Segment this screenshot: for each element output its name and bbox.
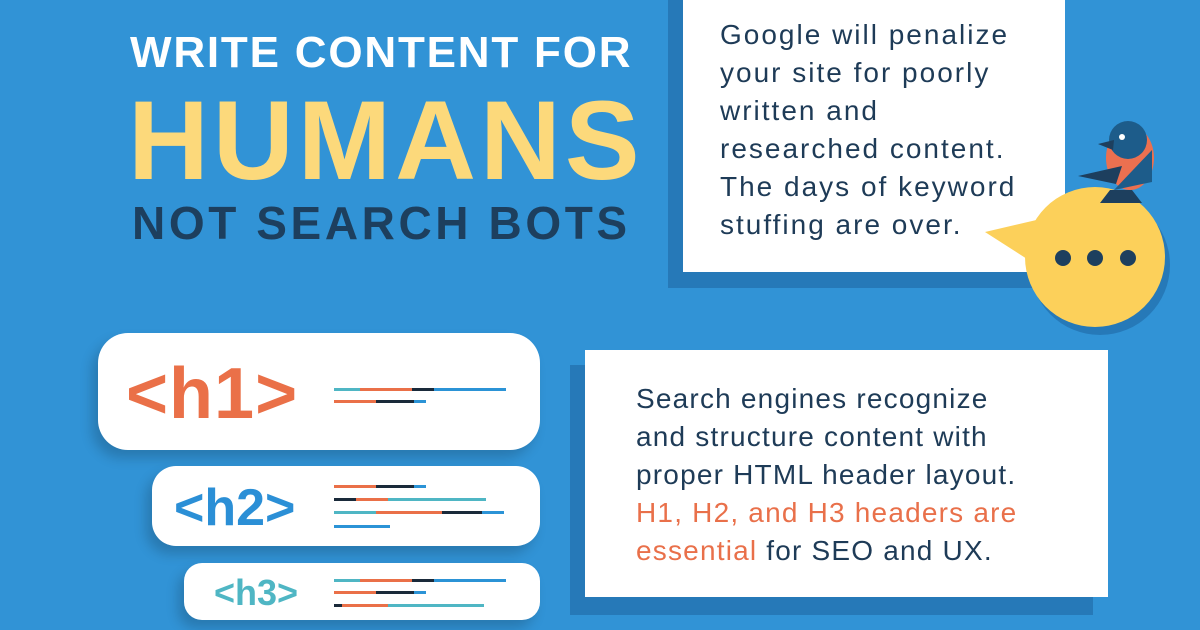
h2 card (152, 466, 540, 546)
panel: google penalty (683, 0, 1065, 272)
text block: proper HTML header layout. (636, 459, 1016, 490)
text block (636, 383, 1017, 566)
text block: H1, H2, and H3 headers are (636, 497, 1017, 528)
text block (720, 19, 1016, 240)
title (128, 28, 644, 249)
card shadow bottom (570, 365, 1093, 615)
text block: The days of keyword (720, 171, 1016, 202)
text block: and structure content with (636, 421, 988, 452)
h1 label: <h1> (126, 354, 298, 434)
title line 2: HUMANS (128, 78, 644, 203)
h1 card (98, 333, 540, 450)
panel: header layout (585, 350, 1108, 597)
text block: your site for poorly (720, 57, 990, 88)
h3 label: <h3> (214, 572, 298, 613)
text block: written and (720, 95, 879, 126)
icon: speech bubble with bird (985, 121, 1170, 335)
title line 3: NOT SEARCH BOTS (132, 197, 631, 249)
card shadow top (668, 0, 1050, 288)
text block: stuffing are over. (720, 209, 962, 240)
text block: Search engines recognize (636, 383, 989, 414)
text block: Google will penalize (720, 19, 1009, 50)
h2 label: <h2> (174, 479, 295, 537)
text block: essential for SEO and UX. (636, 535, 993, 566)
text block: researched content. (720, 133, 1006, 164)
title line 1: WRITE CONTENT FOR (130, 28, 632, 77)
h3 card (184, 563, 540, 620)
